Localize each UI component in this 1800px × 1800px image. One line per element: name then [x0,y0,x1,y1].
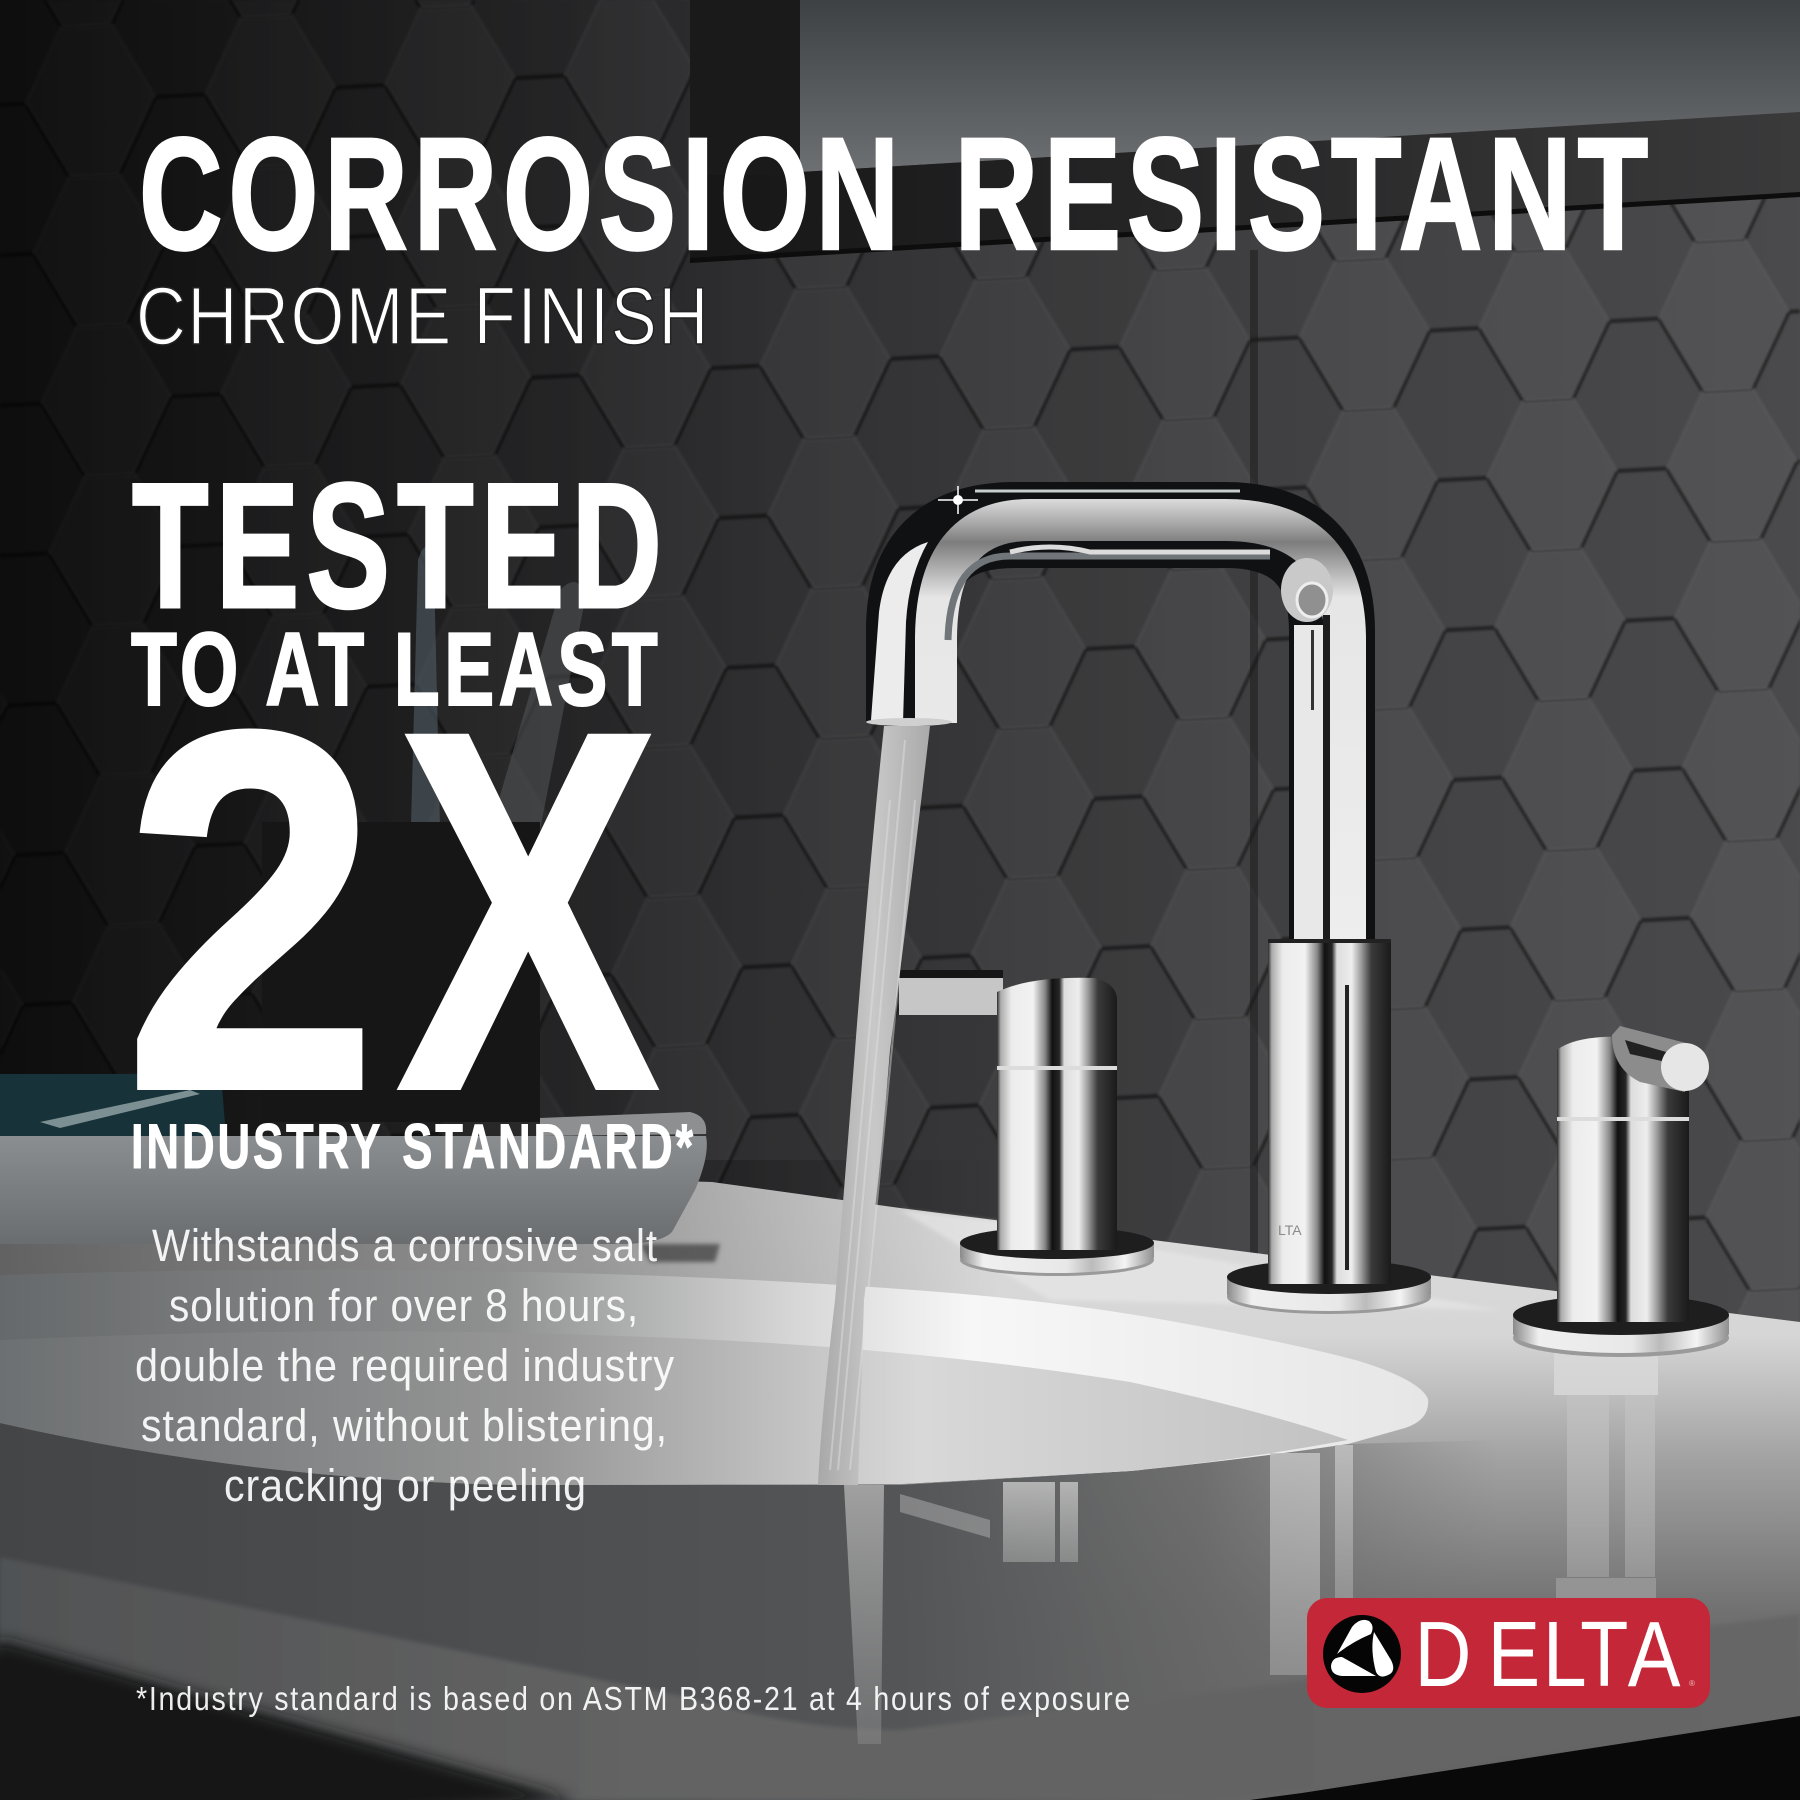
sparkle [938,486,978,514]
big number: 2X: X [396,624,662,1197]
description text: standard, without blistering, [141,1400,668,1451]
big number: 2X: 2 [123,624,379,1197]
background: toothbrush cup [262,547,585,1122]
description text: double the required industry [135,1340,675,1391]
faucet center column: LTA [1278,1222,1302,1238]
description text: cracking or peeling [224,1460,587,1511]
icon: Delta emblem [1323,1615,1401,1693]
big number: 2X [123,624,662,1197]
subtitle: CHROME FINISH [136,271,710,362]
background: hexagon tile wall [0,0,1800,1400]
registered mark: ® [1689,1679,1695,1688]
basin bowl [0,1331,1348,1485]
reflections of faucet in counter [844,1353,1658,1744]
water stream [818,726,930,1485]
description text: solution for over 8 hours, [169,1280,639,1331]
claim line: to at least: TO AT LEAST [131,612,662,728]
claim: tested to at least 2X industry standard [123,446,696,1197]
background: counter below basin [0,1423,1500,1800]
faucet spout [866,486,1345,960]
right handle [1513,1026,1729,1357]
faucet center column [1227,939,1431,1314]
left handle [899,970,1154,1276]
description text [135,1220,675,1511]
background: sink basin [0,1270,1428,1485]
logo: Delta [1307,1598,1710,1708]
wordmark: DELTA [1414,1603,1681,1706]
claim line: tested: TESTED [132,446,669,645]
background: counter front lip [0,1557,1800,1800]
basin rim [0,1270,1428,1485]
footnote: *Industry standard is based on ASTM B368-21 at 4 hours of exposure [136,1680,1132,1717]
background: mirror and shelf [690,0,1800,263]
background: sink counter [0,1160,1800,1800]
background: soap tray and box [0,1074,720,1262]
description text: Withstands a corrosive salt [152,1220,658,1271]
claim line: industry standard: INDUSTRY STANDARD* [131,1112,696,1182]
faucet [818,486,1729,1485]
